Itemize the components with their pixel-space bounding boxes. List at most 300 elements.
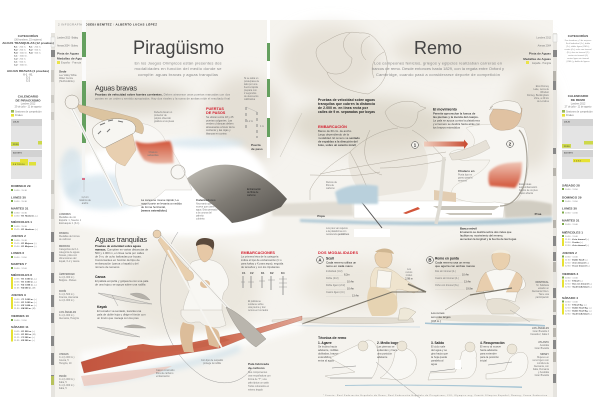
text: embarcación: Largo dependiendo de la [318, 132, 349, 136]
calendario [562, 94, 593, 179]
programme: 12:10 · 4 sin timonel (+) [565, 262, 589, 264]
text: scull: Cada remero utiliza un [326, 260, 357, 264]
medals column: remo right: Australia [540, 344, 550, 347]
step 3: la hoja quede [431, 355, 448, 359]
medals column: Londres etc: Francia, Alemania [59, 296, 79, 299]
heading: Aguas bravas: Aguas bravas [95, 84, 137, 92]
note: helmet: gratitos a tus pieas [154, 120, 175, 123]
callout: embarcaciones: de tamaños y con los tripulantes [241, 265, 280, 269]
callout: pala fabricada de carbono: una empuñadura con [248, 374, 271, 378]
medals column: remo right [530, 281, 550, 377]
heading: técnica: Técnica de remo [318, 336, 347, 340]
medals column: Londres etc: K-1 (1.000 m.) [59, 384, 74, 387]
programme: JUEVES 2 [562, 251, 577, 255]
medals column: Londres etc: C-1 (1.000 m.) [59, 356, 75, 359]
categorias: C-2 [26, 80, 31, 82]
calendario: Londres 2012 [571, 102, 586, 106]
note: paddle: una pierna y doc [248, 306, 266, 309]
medals column: Londres etc: de carbono [59, 238, 72, 241]
categorias: cuatro sin timonel (4-) [568, 54, 588, 57]
note: embarcación [247, 188, 262, 197]
note: canoe material [156, 369, 175, 378]
programme: 10:30 · 11:50 [565, 189, 579, 191]
text: gate width: máximo de [79, 199, 92, 202]
medals column: remo right: Italia, Rumanía [533, 368, 550, 371]
programme: MIÉRCOLES 8 [11, 272, 32, 277]
categorias: CATEGORÍAS [568, 33, 588, 38]
categorias: K-2 · 500 m. [29, 50, 42, 52]
medals column: Londres etc: ÁMSTERDAM [59, 273, 75, 276]
data column: left: Medallas de Aguas [57, 56, 85, 60]
text: el movimiento: las piernas y la inercia del cuerpo. [433, 115, 479, 119]
figure: sweep rower [436, 250, 545, 322]
programme: 11:10 · K2 1.000 m. (+) [14, 305, 37, 307]
programme: 11:50 · Doble Scull (+) [565, 260, 588, 262]
text: caption bottom of canoa [141, 198, 182, 212]
callout: embarcaciones: La primera letra de la categoría [241, 254, 279, 258]
note: paddle: El palista se [248, 300, 262, 303]
callout: puertas de pasos: verdes y blancas deben [206, 122, 234, 126]
programme: SÁBADO 28 [562, 182, 580, 188]
text: el movimiento: Permite aprovechar la fuerza de [433, 112, 476, 116]
note: oars length: 2,98 m [405, 278, 413, 280]
paper with watercolour washes [55, 20, 555, 397]
categorias: CATEGORÍAS [18, 33, 38, 38]
text: remo en punta [435, 256, 475, 268]
diagram: gate dimensions: lado por una [244, 83, 258, 86]
medals column: Londres etc: dimensiones del [59, 257, 77, 260]
table: remo en punta: Dos sin timonel (2-) [435, 270, 456, 273]
programme: 11:35 · K2 200 m. (+) [14, 340, 35, 342]
programme: MARTES 7 [11, 262, 27, 266]
paddle [70, 105, 122, 206]
step 1: adelante, rodillas [318, 348, 339, 352]
sidebar: remo [562, 33, 593, 316]
medals column: Londres etc: C-1 (1.000 m.) [59, 378, 75, 381]
intro text: compite: aguas bravas y aguas tranquilas [138, 72, 218, 77]
panel: remo page [272, 32, 552, 398]
medals column: Londres etc: K-1 (1.500 m.) [59, 293, 74, 296]
note: helmet [154, 111, 175, 123]
step 3: del agua y se [431, 348, 447, 352]
note: vest: salvavidas [147, 154, 159, 157]
programme: 11:35 · K2 500 m. (M) [14, 288, 36, 290]
note: oars: a la plataforma con [326, 230, 347, 233]
medals column: remo right: Gran Bretaña [535, 347, 550, 350]
diagram: gate dimensions: calificativa [244, 98, 256, 101]
programme: DOMINGO 29 [11, 184, 31, 188]
step 3: paralela al [431, 358, 444, 362]
data column: left: Sede [59, 70, 67, 74]
marker: 2: 2 [509, 142, 512, 147]
programme: 12:30 · 4 sin timonel (+) [565, 244, 589, 247]
kayak: dark hull [186, 165, 287, 223]
callout: pala fabricada de carbono: pala típica con pala [248, 382, 269, 384]
note: remo length: son más largos [431, 315, 451, 319]
programme: 10:35 · K1 200 m. (+) [14, 331, 35, 333]
categorias: C-2 · 1000 m. [14, 64, 28, 66]
note: helmet: Debe/ra llevar un [154, 111, 173, 114]
programme: 12:30 · Scull individual (+) [565, 286, 592, 288]
data column: left [57, 36, 85, 83]
medals column: Londres etc: K-1 (1.000 m.) [59, 314, 74, 317]
canoe deck [125, 337, 230, 352]
categorias: K-4 · 1000 m. [14, 52, 28, 54]
byline: 2 INFOGRAFÍA JOSEBI BENÍTEZ / ALBERTO LUCAS LÓPEZ [58, 22, 157, 26]
gate pole right [267, 20, 270, 158]
programme: DOMINGO 29 [562, 196, 582, 200]
note: vest [147, 151, 159, 157]
programme: 15:15 · K1 Hombres (+) [14, 229, 38, 231]
table: scull: Doble ligero (2×2) [326, 284, 345, 287]
paddler: torso and legs [158, 236, 229, 352]
programme: 14:30 · 15:30 [14, 190, 28, 192]
text: el movimiento: y el remero se desliza hacia atrás con [433, 122, 480, 126]
medals column: remo right: participación [536, 296, 550, 299]
programme: 11:15 · C1 200 m. (+) [14, 337, 35, 339]
strip: left tabs [51, 33, 55, 397]
data column: right: de Londres [537, 100, 550, 103]
calendar: agosto: 1 2 3 4 [574, 161, 581, 163]
blue water band [425, 322, 545, 326]
marker: 2 [507, 141, 513, 147]
callout: embarcaciones: EMBARCACIONES [241, 251, 275, 255]
note: oars: Los pies van sujetos [326, 227, 348, 230]
heading: dos modalidades: DOS MODALIDADES [318, 251, 358, 255]
illustration: canoe sprint [80, 230, 302, 392]
photo: water under boat [335, 185, 378, 204]
calendar: agosto [562, 150, 593, 179]
data column: right: Atenas 2004 [538, 44, 552, 48]
note: helmet: protector de [154, 114, 167, 117]
water band bottom [345, 385, 522, 388]
note: remo length: (3,8 m.) [431, 319, 441, 323]
step 3 [428, 341, 477, 380]
intro text: modalidades en función del medio donde se [134, 66, 222, 71]
programme: 11:50 · 8 Scull lig. (+) [565, 304, 587, 306]
text: velocidad [318, 98, 375, 114]
text: chaleco: Punta tipo es [458, 174, 473, 176]
text: kayak [97, 305, 146, 320]
medals column: remo right: Gran Bretaña 4 [533, 330, 550, 333]
text: banco móvil: aumentan la longitud y la fuerza de las bogas [460, 237, 517, 241]
programme: 15:50 · K1 Mujeres (+) [14, 246, 37, 248]
categorias: cuatro ligero sin timonel [567, 57, 590, 60]
note: remo length: Los remos [431, 311, 445, 315]
programme: 10:30 · 11:50 [565, 201, 579, 203]
icons: boat types [241, 276, 287, 295]
callout: pala fabricada de carbono [248, 362, 271, 392]
text: aguas tranquilas description: embarcación (canoa o kayak) y del [95, 262, 139, 266]
callout: puertas de pasos: corriente y las rojas y [206, 128, 231, 132]
medals column: Londres etc: Grecia, 5 [59, 359, 69, 362]
categorias: (2×), doble ligero (LM2×), [566, 45, 590, 48]
calendario: DE REMO [571, 98, 586, 102]
medals column: Londres etc: ATENAS [59, 353, 69, 356]
data column: right: Eton Dorney [536, 85, 550, 88]
paddler: body [65, 95, 192, 206]
note: paddle [248, 300, 269, 312]
programme: 11:15 · K2 1.000 m. (+) [14, 284, 37, 286]
data column: left: Atenas 2004 · Sidney [57, 44, 79, 48]
medals column: Londres etc: MEDIDAS [59, 245, 70, 248]
text: embarcación: bote, sobre un asiento móvil [318, 143, 356, 147]
arrow: movement [424, 140, 468, 149]
text: gate width: ancho [82, 202, 89, 205]
medals column: Londres etc: Hungría, 10 [59, 362, 72, 365]
text: el movimiento: los brazos extendidos [433, 126, 461, 130]
programme: SÁBADO 11 [11, 324, 29, 329]
marker: B: B [428, 258, 432, 263]
section: remo en punta [272, 250, 545, 327]
programme: 14:30 · K1 Hombres (+) [14, 216, 38, 218]
callout: puertas de pasos: Se ubican entre 18 y 25 [206, 115, 234, 119]
text: caption bottom of canoa: La canoa se mueve rápido; La [141, 198, 179, 202]
step 4: para la posición [480, 355, 499, 359]
step 1: dobladas, brazos [318, 352, 339, 356]
callout: puertas de pasos: PUERTAS [206, 107, 224, 111]
note: paddle: sostiene sobre [248, 303, 264, 306]
medals column: remo right: SIDNEY [540, 353, 549, 356]
diagram: gate dimensions: Puerta [251, 143, 261, 147]
programme: MIÉRCOLES 1 [11, 219, 32, 224]
boat cross-section [272, 200, 552, 237]
text: kayak: El remador va sentado, levanta una [97, 309, 142, 313]
text: aguas tranquilas description: Pruebas de velocidad sobre aguas [95, 244, 141, 248]
note: oars length: remos [406, 271, 413, 274]
calendario: Londres 2012 [21, 102, 36, 106]
text: el movimiento: El movimiento [433, 108, 457, 112]
medals column: remo right: Mujeres en [537, 356, 550, 359]
medals column: remo right: M. Solidaria [536, 284, 550, 287]
medals column: Londres etc: Bélgica - Países [59, 279, 77, 282]
text: calentadores: mueve que cierre [196, 206, 215, 208]
note: seat: Con tipo de respaldo [201, 359, 224, 362]
note: embarcación: Embarcación [247, 188, 262, 191]
text: banco móvil: Banco móvil [460, 226, 477, 230]
calendario: 27 de julio - 11 de agosto [565, 106, 592, 108]
table: scull: 10,4m [347, 280, 354, 284]
categorias: AGUAS BRAVAS (4 pruebas) [7, 69, 49, 73]
calendario: Finales [15, 114, 24, 117]
medals column: remo right: Alemania Orien. [532, 290, 549, 293]
medals column: Londres etc: Alemania, Hungría [59, 317, 79, 320]
intro text: barcos de remo. Desde entonces hasta 1829, con la regata entre Oxford y [372, 66, 504, 71]
diagram: gate dimensions: poste/pasa de [244, 80, 260, 83]
text: scull [326, 256, 357, 268]
programme: MIÉRCOLES 1 [562, 230, 583, 234]
step 3: gira hacia que [431, 352, 448, 356]
table: scull: 8,2m [344, 274, 350, 276]
calendario [11, 94, 42, 179]
callout: pala fabricada de carbono: Sus componentes [248, 371, 268, 374]
text: kayak: pala de doble hoja y dirige el timón con [97, 312, 146, 316]
callout: pala fabricada de carbono: Pala fabricada [248, 362, 269, 366]
diagram: gate dimensions: de descuento [244, 95, 259, 98]
programme: 10:55 · K1 200 m. (M) [14, 334, 36, 336]
gate line [83, 180, 85, 192]
callout: embarcaciones [241, 251, 287, 295]
text: caption bottom of canoa: (remos extendidos) [141, 208, 167, 212]
text: canoa: El palista empuña y golpea la con una pala [95, 279, 149, 283]
programme: 14:30 · 15:30 [14, 240, 28, 242]
footnote: * Fuente: Real Federación Española de Remo, Real Federación Española de Piragüismo; COI; Olympics.org; Comité Olímpico Español; Rowing; Canoe Federation [323, 394, 548, 397]
figure: scull rower [272, 248, 426, 324]
data column: right: Londres 2012 [536, 36, 552, 40]
diagram: gate dimensions: 2 segundos [244, 92, 257, 95]
canoe hull [81, 316, 302, 373]
categorias: K-1 · 200 m. [29, 46, 42, 48]
text: el movimiento [433, 108, 480, 130]
programme: 10:35 · K1 1.000 m. (+) [14, 278, 37, 280]
text: remo en punta: Remo en punta [435, 256, 459, 260]
calendario: DE PIRAGÜISMO [15, 98, 41, 102]
medals column: Londres etc: Categorías de K-1 [59, 248, 79, 251]
calendar: julio: 29 30 [564, 146, 570, 148]
step 2: Las piernas se [377, 344, 395, 348]
programme: 14:30 · 15:30 [14, 201, 28, 203]
text: note seat: brazos de os pies [519, 189, 539, 192]
text: embarcación: Banco de 60 cm. de ancho [318, 129, 352, 133]
step 2: 2. Medio bogo [377, 341, 398, 345]
text: chaleco: remeros [458, 180, 468, 182]
illustration: white water and slalom [60, 20, 302, 236]
table: scull: Cuatro ligero (4×) [326, 291, 345, 294]
icon: kayak sketch [97, 325, 146, 337]
note: canoe material: embarcación [156, 375, 170, 378]
data column: right: Medallas de Aguas [523, 57, 551, 61]
programme: 10:30 · 12:00 [14, 268, 28, 270]
heading: Aguas tranquilas: Aguas tranquilas [95, 235, 147, 244]
diagram: gate dimensions: 4 m [260, 125, 264, 128]
categorias: C-1 · 500 m. [14, 62, 27, 64]
programme: MARTES 31 [11, 206, 29, 210]
categorias: (36 hombres, 15 mujeres) [14, 38, 42, 42]
medals column: Londres etc: A-1 (1.000 m.) [59, 299, 74, 302]
programme: 10:30 · 11:40 [565, 236, 579, 238]
data column: right: Windsor [540, 91, 549, 94]
paddle: canoe [153, 230, 266, 348]
categorias: C-2 · 200 m. [14, 58, 27, 60]
gate pole left [82, 20, 86, 180]
calendar: agosto: AGOSTO [564, 152, 573, 154]
medals column: remo right: ATLANTA [538, 341, 549, 344]
programme: VIERNES 10 [11, 314, 29, 318]
step 4 [480, 341, 528, 379]
table: remo en punta: Cuatro sin timonel (4-) [435, 277, 459, 280]
calendario: Sesiones de competición [15, 110, 42, 113]
gate wire [280, 113, 302, 157]
calendario: 29 de julio - 11 de agosto [15, 106, 42, 108]
text: canoa: de una hoja y se apoya sobre una rodilla [95, 282, 146, 286]
medals column: Londres etc: Medallas de oro [59, 216, 77, 219]
programme: 12:50 · Scull individual (+) [565, 314, 592, 316]
text: gate width: 1,2 cm [81, 196, 89, 199]
text: kayak: Kayak [97, 305, 107, 309]
step 4: inicial [480, 358, 487, 362]
programme: 10:30 · 11:40 [565, 302, 579, 304]
marker: 1 [412, 142, 418, 148]
figure: rower 2 [434, 101, 529, 206]
section: técnica de remo [318, 336, 528, 398]
marker: A: A [318, 258, 322, 263]
text: banco móvil: facilitan su movimiento del remero, [460, 234, 503, 238]
calendar: julio [562, 119, 593, 149]
callout: pala fabricada de carbono: de carbono [248, 366, 265, 370]
step 4: para extender [480, 352, 497, 356]
note: canoe material: fibra de carbono [156, 372, 174, 375]
programme: 12:30 · Doble Scull lig. (+) [565, 310, 592, 312]
programme: JUEVES 9 [11, 293, 26, 297]
figure: rower 1 sketch [310, 101, 446, 200]
data column: right: Lake, cerca de [533, 88, 550, 91]
data column: left: Lee Valley White [59, 74, 77, 77]
step 4: hacia adelante [480, 348, 498, 352]
medals column: remo right: remo ligero con [533, 359, 550, 362]
medals column: Londres etc: Italia, 5 [59, 381, 67, 384]
diagram: gate dimensions: Si se salta un [244, 77, 259, 80]
text: calentadores: palmito [196, 214, 204, 218]
boat cross-section: Popa [317, 214, 325, 218]
text: fibre note: Remos de [326, 181, 338, 184]
medals column: Londres etc: PEKÍN [59, 375, 67, 378]
text: fibre note: carbono [326, 187, 335, 190]
programme: 12:10 · Doble Scull lig. (+) [565, 308, 592, 310]
categorias: (LM4-) y doble de ligeras [566, 60, 590, 63]
text: caption bottom of canoa: de forma horizontal, [141, 205, 166, 209]
calendar: julio [11, 119, 42, 149]
text: chaleco: Chaleco en [458, 169, 475, 173]
text: velocidad: calles de 9 m. separadas por boyas [318, 110, 375, 114]
text: canoa [95, 275, 149, 286]
note: embarcación: de fibra de [247, 191, 259, 194]
categorias: cuatro (4×), ocho con timonel [565, 48, 592, 51]
note: oars [326, 227, 350, 236]
text: note seat: son embarcación [519, 186, 538, 189]
programme: 12:30 · 8 con timonel (+) [565, 264, 590, 268]
medals column: Londres etc: España: 1, Suecia: 1 [59, 219, 82, 222]
callout: embarcaciones: K1 [261, 271, 265, 275]
strip: right tabs [553, 33, 557, 397]
categorias: Dos hombres y 5 de mujeres [565, 39, 591, 42]
programme: LUNES 30 [562, 206, 577, 210]
marker: A [317, 257, 323, 263]
text: calentadores: Necesario que [196, 202, 212, 206]
categorias: K-1 · 200 m. [14, 46, 27, 48]
panel: piragüismo page [57, 20, 302, 392]
categorias: K-2 · 200 m. [14, 50, 27, 52]
table: scull: Doble (2×2) [326, 277, 339, 280]
intro text: En los Juegos Olímpicos están presentes dos [134, 60, 222, 66]
programme: 14:30 · 15:30 [14, 212, 28, 214]
diagram: gate dimensions: fuerza rápida [244, 86, 259, 89]
text: calentadores [196, 198, 218, 220]
text: aguas bravas description: postes en un orden y sentido apropiados. Hay dos rivales y la suma de ambas mide el resultado final [95, 96, 230, 100]
table: scull: 10,4m [347, 288, 354, 290]
text: calentadores: agua. Esta pensado [196, 208, 218, 212]
medals column: remo right: MONTREAL [535, 281, 550, 284]
text: kayak: un timón que maneja con los pies [97, 316, 139, 320]
title: Piragüismo: Piragüismo [133, 38, 224, 59]
intro text [134, 60, 222, 77]
medals column: remo right: Alemania, con [534, 365, 550, 368]
calendario: Finales [566, 114, 575, 117]
text: aguas tranquilas description [95, 244, 149, 269]
table: remo en punta: 10,4m [462, 274, 469, 276]
text: embarcación: modalidad. El remero va sentado [318, 136, 360, 140]
callout: pala fabricada de carbono: Todos colocados en [248, 385, 270, 388]
programme: 12:10 · Dos sin timonel (+) [565, 282, 592, 286]
